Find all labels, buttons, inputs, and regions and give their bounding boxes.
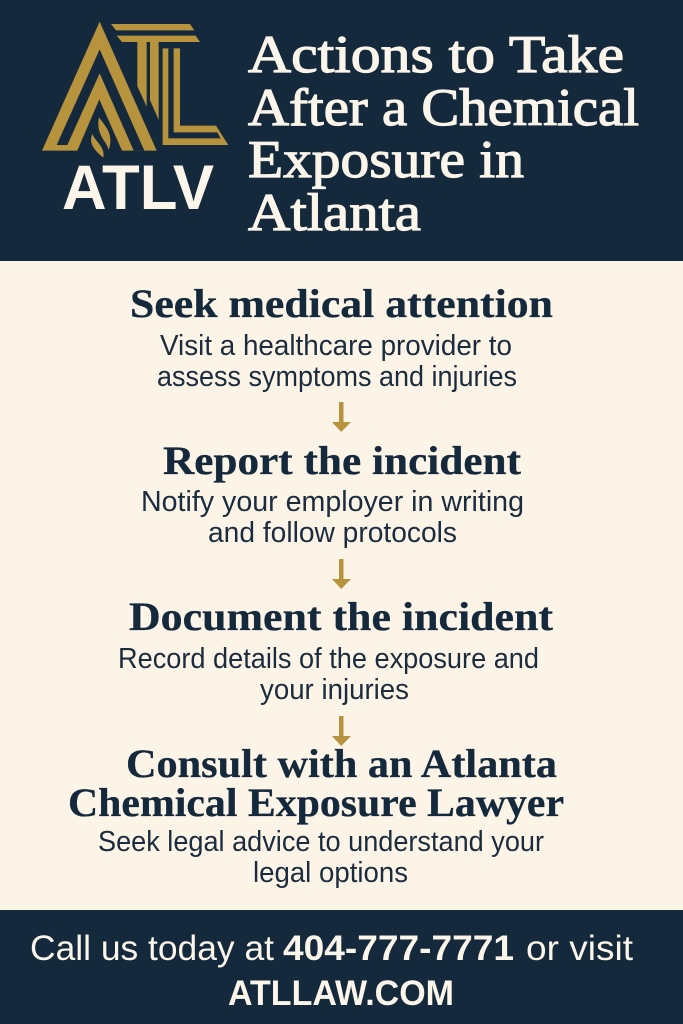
step 3 description: Record details of the exposure and	[118, 643, 539, 675]
step 2 description: Notify your employer in writing	[141, 486, 524, 518]
arrow 2	[332, 559, 351, 589]
logo letter A	[42, 22, 157, 151]
step 3 description: your injuries	[260, 674, 409, 706]
step 4 heading: Consult with an Atlanta	[126, 741, 557, 786]
logo flame	[91, 117, 110, 158]
step 3 heading: Document the incident	[129, 594, 554, 639]
step 3 description	[118, 643, 539, 706]
step 1: seek medical attention	[130, 281, 553, 393]
arrow 3	[332, 716, 351, 746]
title: After a Chemical	[248, 79, 639, 137]
step 1 description: assess symptoms and injuries	[157, 361, 517, 393]
title: Exposure in	[248, 131, 524, 189]
logo wordmark: ATLV	[62, 153, 214, 223]
step 2 description	[141, 486, 524, 549]
step 4 description: Seek legal advice to understand your	[98, 826, 544, 858]
call to action	[30, 929, 633, 968]
call to action: Call us today at	[30, 929, 274, 968]
step 1 heading: Seek medical attention	[130, 281, 553, 326]
title: Actions to Take	[248, 26, 624, 84]
step 1 description: Visit a healthcare provider to	[160, 330, 512, 362]
logo	[42, 22, 228, 158]
footer band	[0, 910, 683, 1024]
call to action: 404-777-7771	[283, 929, 514, 968]
step 4 description: legal options	[253, 857, 408, 889]
step 4 heading: Chemical Exposure Lawyer	[68, 780, 564, 825]
logo letter L	[163, 48, 228, 145]
title	[248, 26, 639, 242]
title: Atlanta	[248, 184, 421, 242]
header band	[0, 0, 683, 261]
step 3: document the incident	[118, 594, 554, 706]
logo letter T	[111, 24, 200, 120]
step 2 description: and follow protocols	[208, 517, 457, 549]
step 4: consult a lawyer	[68, 741, 564, 889]
call to action: or visit	[526, 929, 633, 968]
step 2 heading: Report the incident	[163, 438, 522, 483]
step 4 heading	[68, 741, 564, 825]
step 2: report the incident	[141, 438, 524, 549]
website: ATLLAW.COM	[228, 974, 454, 1013]
step 1 description	[157, 330, 517, 393]
arrow 1	[332, 402, 351, 432]
step 4 description	[98, 826, 544, 889]
